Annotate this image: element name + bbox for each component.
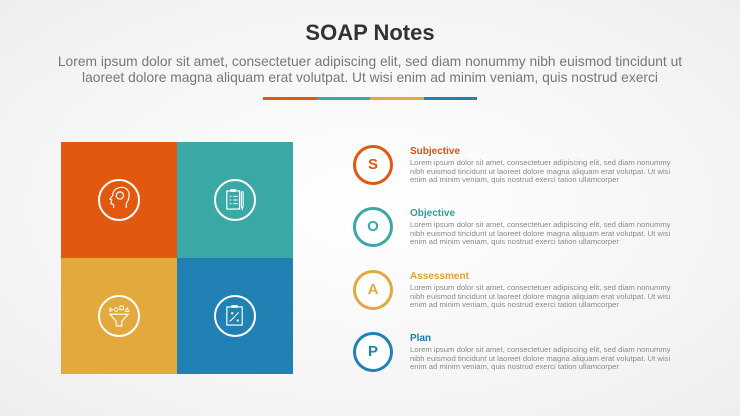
item: subjective: Subjective xyxy=(410,146,460,157)
item: objective: enim ad minim veniam, quis nostrud exerci tation ullamcorper xyxy=(410,237,619,246)
item: subjective: S xyxy=(368,156,378,173)
quadrant: objective xyxy=(177,142,293,258)
item: plan xyxy=(353,332,671,372)
item: assessment: A xyxy=(368,281,378,298)
quadrant: subjective xyxy=(61,142,177,258)
quadrant: plan xyxy=(177,258,293,374)
item: plan: P xyxy=(368,343,378,360)
item: plan: nibh euismod tincidunt ut laoreet dolore magna aliquam erat volutpat. Ut wisi xyxy=(410,354,670,363)
item: subjective: enim ad minim veniam, quis nostrud exerci tation ullamcorper xyxy=(410,175,619,184)
title: SOAP Notes xyxy=(305,20,435,45)
item: assessment: nibh euismod tincidunt ut laoreet dolore magna aliquam erat volutpat. Ut wisi xyxy=(410,292,670,301)
item: objective xyxy=(353,207,671,247)
item: assessment: enim ad minim veniam, quis nostrud exerci tation ullamcorper xyxy=(410,300,619,309)
subtitle: Lorem ipsum dolor sit amet, consectetuer adipiscing elit, sed diam nonummy nibh euismod tincidunt ut xyxy=(58,54,682,69)
subtitle: laoreet dolore magna aliquam erat volutpat. Ut wisi enim ad minim veniam, quis nostrud exerci xyxy=(82,70,658,85)
item: objective: Objective xyxy=(410,208,455,219)
item: objective: O xyxy=(367,218,379,235)
item: subjective xyxy=(353,145,671,185)
item: plan: enim ad minim veniam, quis nostrud exerci tation ullamcorper xyxy=(410,362,619,371)
subtitle xyxy=(58,54,682,85)
item: objective: Lorem ipsum dolor sit amet, consectetuer adipiscing elit, sed diam nonummy xyxy=(410,220,671,229)
item: plan: Plan xyxy=(410,333,431,344)
item: objective: nibh euismod tincidunt ut laoreet dolore magna aliquam erat volutpat. Ut wisi xyxy=(410,229,670,238)
item: subjective: nibh euismod tincidunt ut laoreet dolore magna aliquam erat volutpat. Ut wisi xyxy=(410,167,670,176)
color bar xyxy=(263,97,477,100)
item: assessment xyxy=(353,270,671,310)
item: plan: Lorem ipsum dolor sit amet, consectetuer adipiscing elit, sed diam nonummy xyxy=(410,345,671,354)
grid panel xyxy=(61,142,293,374)
item: assessment: Assessment xyxy=(410,271,469,282)
quadrant: assessment xyxy=(61,258,177,374)
item: subjective: Lorem ipsum dolor sit amet, consectetuer adipiscing elit, sed diam nonummy xyxy=(410,158,671,167)
item: assessment: Lorem ipsum dolor sit amet, consectetuer adipiscing elit, sed diam nonummy xyxy=(410,283,671,292)
